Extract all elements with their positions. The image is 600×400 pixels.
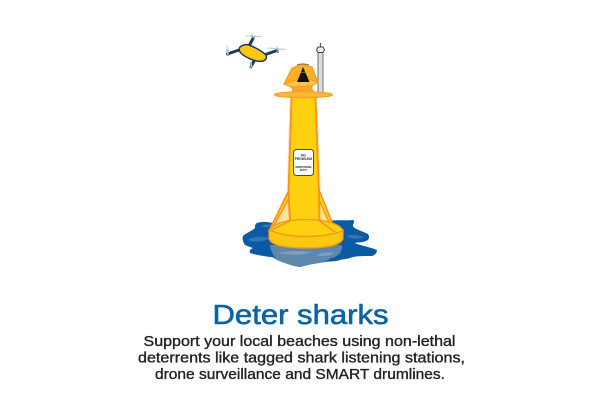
title: Deter sharks <box>212 299 388 330</box>
body text: deterrents like tagged shark listening stations, <box>138 350 465 366</box>
left fin <box>272 199 290 229</box>
base <box>269 220 343 248</box>
sign: BUOY <box>300 169 307 172</box>
mast <box>316 43 324 93</box>
drone motors <box>228 36 278 68</box>
icon: buoy <box>269 43 343 248</box>
drone body <box>239 45 266 61</box>
icon: water puddle <box>243 220 377 267</box>
body text: Support your local beaches using non-lethal <box>144 334 456 350</box>
drone rotors <box>227 36 285 67</box>
icon: drone <box>227 36 285 68</box>
sign: NO <box>301 154 306 158</box>
body text: drone surveillance and SMART drumlines. <box>155 367 445 383</box>
sign: PROWLING <box>295 157 313 161</box>
sign: MONITORING <box>295 166 312 169</box>
sign <box>294 150 314 176</box>
right fin <box>318 199 333 231</box>
cap <box>284 64 318 90</box>
top flange <box>292 90 314 94</box>
column <box>289 97 320 222</box>
water reflection <box>270 245 342 267</box>
flared column with fins <box>269 190 336 234</box>
drone arms <box>228 38 277 67</box>
water highlights <box>247 224 364 242</box>
body text <box>138 334 465 383</box>
